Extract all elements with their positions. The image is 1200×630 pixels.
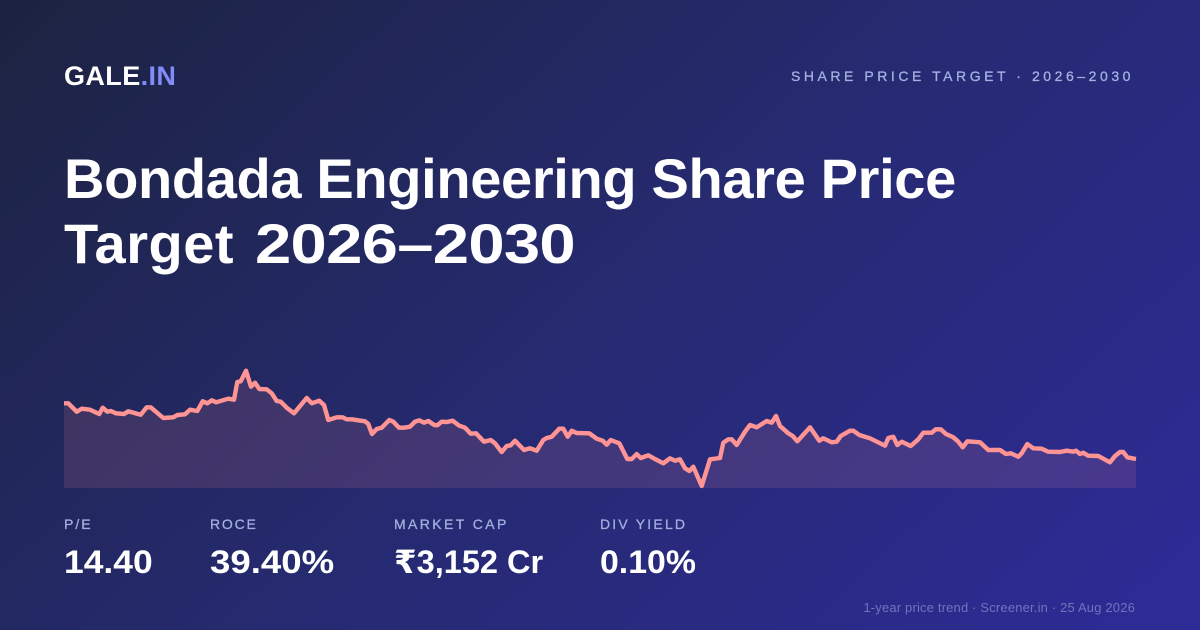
footer source note: 1-year price trend · Screener.in · 25 Aug 2026 (863, 600, 1135, 615)
stat: dividend yield label: DIV YIELD (600, 516, 687, 532)
stat: market cap label: MARKET CAP (394, 516, 509, 532)
stat: ROCE label: ROCE (210, 516, 258, 532)
stat: market cap value: ₹3,152 Cr (394, 544, 543, 580)
title line 1: Bondada Engineering Share Price (64, 147, 956, 210)
title (64, 147, 956, 275)
stat: dividend yield value: 0.10% (600, 544, 696, 580)
stat: ROCE value: 39.40% (210, 544, 334, 580)
chart price line (64, 371, 1136, 486)
chart area fill (64, 371, 1136, 488)
stat: P/E label: P/E (64, 516, 93, 532)
stat: P/E value: 14.40 (64, 544, 153, 580)
title line 2: Target: Target (64, 212, 234, 275)
title line 2: years: 2026–2030 (255, 212, 575, 275)
logo: GALE.IN (64, 61, 176, 91)
kicker: SHARE PRICE TARGET · 2026–2030 (791, 68, 1134, 84)
